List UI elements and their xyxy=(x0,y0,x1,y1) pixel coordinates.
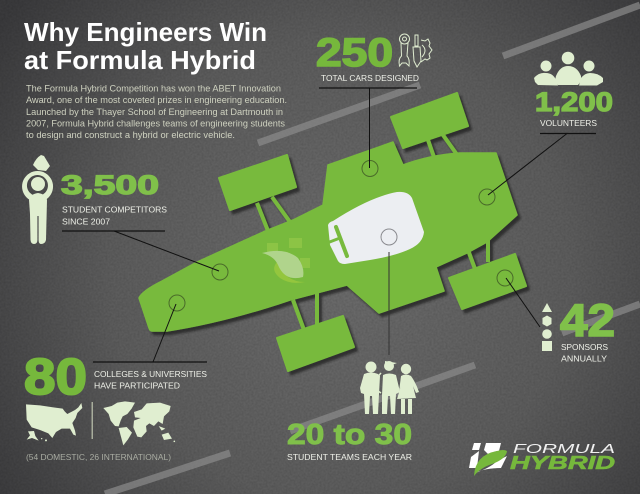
stat: 80 colleges and universities: HAVE PARTICIPATED xyxy=(94,382,180,390)
intro paragraph: to design and construct a hybrid or electric vehicle. xyxy=(26,130,235,140)
domestic and international note: (54 DOMESTIC, 26 INTERNATIONAL) xyxy=(26,452,171,462)
intro paragraph: Launched by the Thayer School of Engineering at Dartmouth in xyxy=(26,107,283,117)
car struts xyxy=(257,135,488,330)
callout markers and leader lines xyxy=(62,88,596,362)
car body xyxy=(139,142,517,331)
car cockpit xyxy=(327,192,424,264)
stat: 3,500 student competitors: SINCE 2007 xyxy=(62,218,110,226)
stat: 80 colleges and universities xyxy=(24,348,208,405)
stat: 20 to 30 student teams: 20 to 30 xyxy=(287,419,412,451)
wheel: rear right xyxy=(449,254,526,309)
icon: world map xyxy=(103,401,175,445)
stat: 42 sponsors annually: ANNUALLY xyxy=(561,354,608,364)
icon: sponsor shapes xyxy=(542,303,552,351)
Formula Hybrid logo: FORMULA xyxy=(513,441,615,456)
icon: student team xyxy=(360,361,419,414)
intro paragraph: The Formula Hybrid Competition has won the ABET Innovation xyxy=(26,84,281,94)
icon: USA map xyxy=(26,403,82,441)
wheel: front left xyxy=(219,155,296,210)
wheel: front right xyxy=(277,316,354,371)
stat: 3,500 student competitors: 3,500 xyxy=(61,170,159,200)
stat: 3,500 student competitors: STUDENT COMPETITORS xyxy=(62,206,168,214)
Formula Hybrid logo: HYBRID xyxy=(510,453,615,473)
stat: 80 colleges and universities: 80 xyxy=(24,348,87,405)
stat: 42 sponsors annually: 42 xyxy=(560,295,615,346)
intro paragraph xyxy=(26,84,287,140)
stat: 1,200 volunteers: 1,200 xyxy=(535,87,613,117)
stat: 80 colleges and universities: COLLEGES & UNIVERSITIES xyxy=(94,370,208,379)
stat: 20 to 30 student teams: STUDENT TEAMS EACH YEAR xyxy=(287,453,412,462)
wheel: rear left xyxy=(391,93,468,148)
title xyxy=(24,17,267,75)
stat: 250 total cars designed xyxy=(316,31,419,83)
stat: 250 total cars designed: 250 xyxy=(316,31,393,75)
stat: 20 to 30 student teams xyxy=(287,419,412,462)
intro paragraph: Award, one of the most coveted prizes in engineering education. xyxy=(26,95,287,105)
Formula Hybrid logo xyxy=(469,441,615,476)
intro paragraph: 2007, Formula Hybrid challenges teams of engineering students xyxy=(26,118,285,128)
stat: 1,200 volunteers xyxy=(535,87,613,128)
stat: 42 sponsors annually xyxy=(560,295,615,364)
title: Why Engineers Win xyxy=(24,17,267,47)
stat: 1,200 volunteers: VOLUNTEERS xyxy=(540,119,598,128)
stat: 3,500 student competitors xyxy=(61,170,168,226)
race car illustration xyxy=(139,93,526,371)
car logo mark xyxy=(262,238,310,283)
stat: 42 sponsors annually: SPONSORS xyxy=(561,343,608,352)
map divider xyxy=(92,402,93,439)
title: at Formula Hybrid xyxy=(24,45,256,75)
icon: volunteers group xyxy=(534,52,603,86)
stat: 250 total cars designed: TOTAL CARS DESIGNED xyxy=(321,74,419,83)
icon: person holding trophy xyxy=(22,155,53,244)
icon: tools xyxy=(399,34,432,67)
